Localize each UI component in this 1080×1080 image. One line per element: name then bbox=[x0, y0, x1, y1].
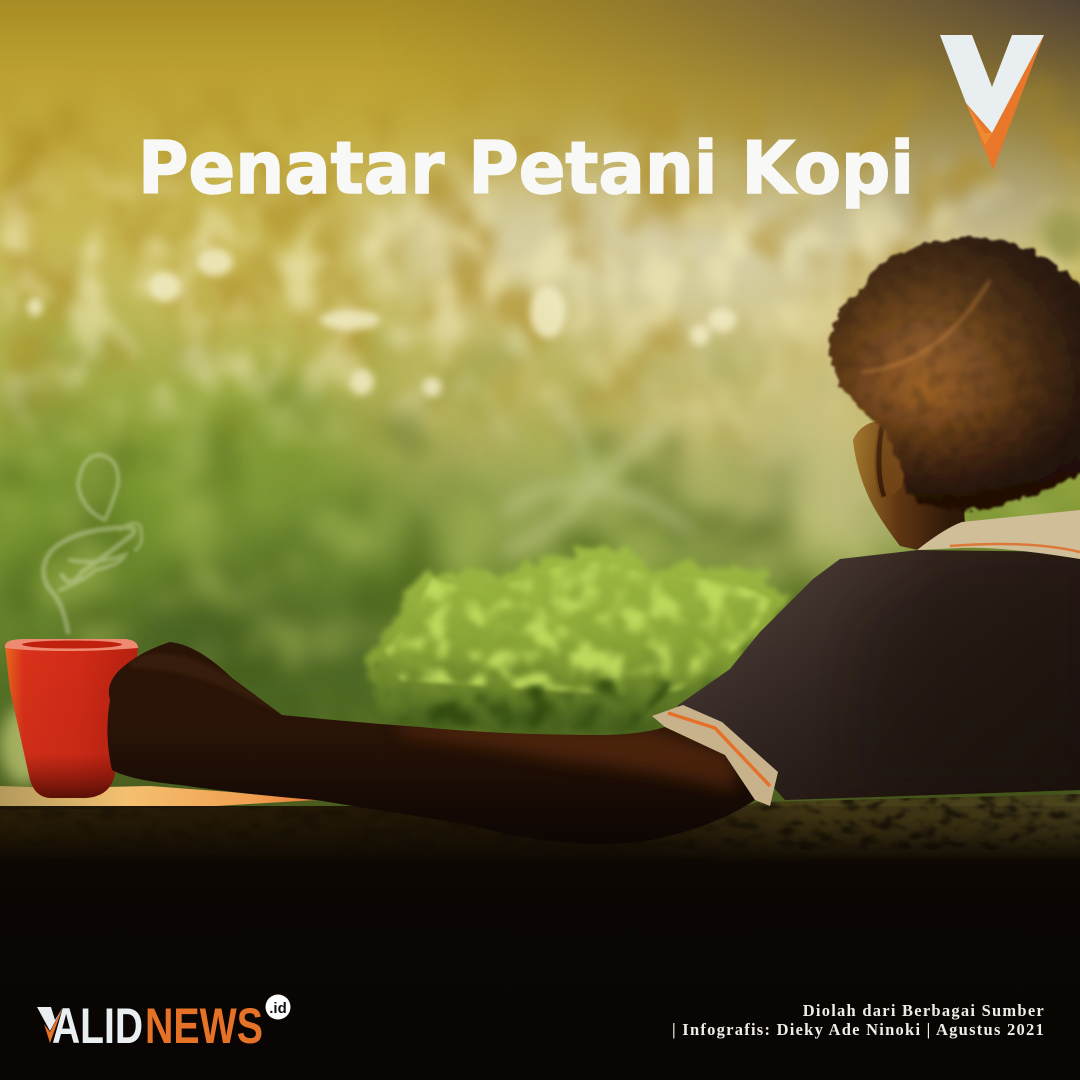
arm top light bbox=[130, 653, 735, 790]
ear bbox=[874, 425, 905, 498]
logo: VALIDNEWS.id bbox=[37, 994, 290, 1054]
wordmark white: ALID bbox=[52, 998, 143, 1054]
lens glow bbox=[760, 200, 1080, 500]
arm with hand holding mug bbox=[107, 642, 755, 844]
bush in the foreground bbox=[372, 549, 788, 735]
hair curl texture bbox=[835, 243, 1080, 506]
gold blotches bbox=[0, 60, 1080, 460]
pale foliage blotches bbox=[0, 320, 1080, 760]
red coffee mug bbox=[5, 639, 138, 798]
source credit: Diolah dari Berbagai Sumber bbox=[803, 1001, 1045, 1020]
top corner shading bbox=[479, 0, 1080, 220]
source credit: | Infografis: Dieky Ade Ninoki | Agustus 2021 bbox=[672, 1020, 1045, 1039]
V mark bbox=[44, 1007, 63, 1043]
pale foliage corner lower left bbox=[0, 705, 50, 785]
sleeve trim bbox=[652, 705, 778, 806]
source credit bbox=[672, 1001, 1045, 1039]
shirt back shadow bbox=[852, 560, 1080, 790]
V mark white bbox=[37, 1007, 63, 1031]
id badge bbox=[266, 994, 290, 1020]
blurred palm fronds bbox=[510, 410, 690, 550]
id badge: .id bbox=[269, 1000, 287, 1017]
bokeh highlights bbox=[27, 248, 736, 397]
head with curly hair bbox=[760, 200, 1080, 511]
title: Penatar Petani Kopi bbox=[138, 126, 914, 210]
dark foliage blotches bbox=[0, 320, 1080, 760]
stone wall bbox=[0, 794, 1080, 1036]
large tonal masses bbox=[0, 150, 1080, 710]
right edge foliage bbox=[1040, 210, 1080, 260]
logo: V mark top right bbox=[940, 35, 1044, 170]
photo background: blurred forest and sky bbox=[0, 0, 1080, 810]
neck and face bbox=[853, 420, 965, 550]
mug rim bbox=[5, 639, 138, 651]
pale glow behind the head bbox=[770, 280, 950, 560]
lens flare arc bbox=[862, 280, 990, 372]
wordmark orange: NEWS bbox=[145, 998, 263, 1054]
pale bokeh clusters bbox=[0, 150, 1080, 470]
steam rising from the mug bbox=[43, 455, 142, 632]
shirt bbox=[677, 550, 1080, 800]
sunlit ledge bbox=[0, 786, 316, 809]
shirt collar bbox=[917, 510, 1080, 559]
